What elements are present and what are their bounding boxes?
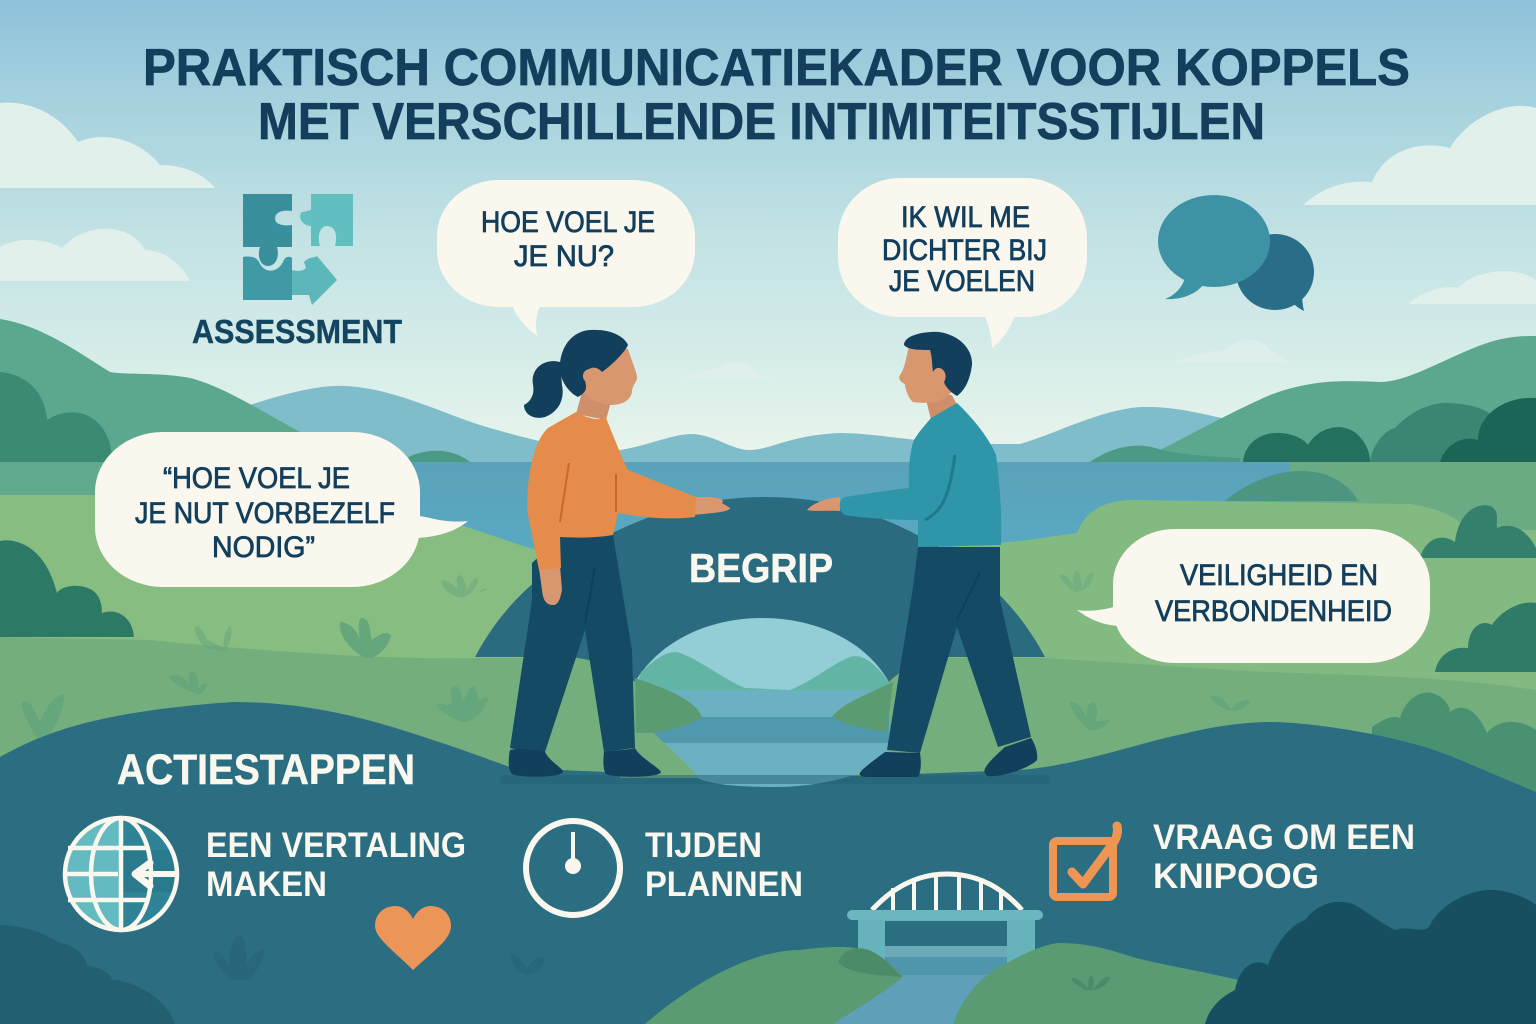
woman head [580, 345, 637, 405]
step: tijden plannen [645, 826, 803, 904]
teal sweater [840, 403, 1001, 547]
river banks [620, 678, 893, 778]
reaching hand [693, 497, 730, 515]
bubble: hoe voel je nu [437, 180, 695, 336]
woman hair [560, 330, 628, 397]
bridge: Begrip arch [475, 497, 1045, 692]
hanging hand [539, 566, 562, 605]
title [143, 39, 1410, 151]
meadow left [0, 495, 640, 680]
bubble: hoe voel je nu: JE NU? [514, 240, 614, 273]
step: vraag om een knipoog [1153, 818, 1415, 896]
man hand [807, 497, 840, 511]
man hair [904, 332, 972, 396]
back trees right [1243, 398, 1536, 462]
meadow right [640, 500, 1536, 720]
bottom right green hill [953, 943, 1280, 1024]
bottom hills and river [0, 874, 1536, 1024]
bush right lower [1372, 692, 1536, 800]
stream under the bridge [635, 690, 889, 787]
faint tufts [214, 935, 545, 980]
step: vraag om een knipoog: VRAAG OM EEN [1153, 818, 1415, 857]
title: PRAKTISCH COMMUNICATIEKADER VOOR KOPPELS [143, 39, 1410, 97]
right hill [1130, 336, 1536, 470]
bubble: veiligheid en verbondenheid: VERBONDENHEID [1155, 595, 1392, 628]
pants [510, 535, 635, 752]
left hill [0, 319, 360, 470]
clouds [0, 103, 1536, 380]
icon: heart [375, 906, 451, 970]
step: tijden plannen: PLANNEN [645, 865, 803, 904]
step: een vertaling maken: EEN VERTALING [206, 826, 466, 865]
tree right middle [1435, 603, 1536, 672]
background: sky [0, 0, 1536, 470]
hills inside the opening [635, 652, 889, 692]
title: MET VERSCHILLENDE INTIMITEITSSTIJLEN [258, 93, 1265, 151]
woman figure [509, 330, 730, 777]
bubble: veiligheid en verbondenheid [1077, 529, 1430, 663]
step: tijden plannen: TIJDEN [645, 826, 762, 865]
bottom left green hill [645, 947, 903, 1024]
step: vraag om een knipoog: KNIPOOG [1153, 857, 1319, 896]
bubble: left quote: JE NUT VORBEZELF [135, 497, 395, 530]
icon: speech bubbles [1158, 195, 1314, 311]
bubble: left quote [95, 432, 468, 587]
woman ear [583, 369, 597, 383]
icon: orange checkbox [1053, 826, 1118, 897]
heading: actiestappen: ACTIESTAPPEN [117, 746, 415, 794]
begrip label: BEGRIP [689, 545, 833, 591]
icon: clock [526, 821, 620, 915]
step: een vertaling maken: MAKEN [206, 865, 327, 904]
river bottom [833, 975, 1000, 1024]
bridge opening with sky [635, 618, 889, 692]
left and right shore bands [0, 462, 1536, 542]
arch and hangers [872, 874, 1022, 910]
bubble: dichter bij je voelen [838, 178, 1087, 348]
bottom-right dark bush [1205, 890, 1536, 1024]
orange sweater [527, 412, 696, 570]
distant blue mountains [250, 386, 1230, 470]
grass tufts [22, 570, 1250, 740]
bubble: veiligheid en verbondenheid: VEILIGHEID EN [1180, 559, 1378, 592]
lower meadow [0, 637, 1536, 800]
neck [576, 392, 612, 420]
bottom-left bush [0, 925, 175, 1024]
man figure [807, 332, 1037, 777]
man head [899, 345, 955, 403]
ground shadow [500, 775, 1050, 784]
bubble: dichter bij je voelen: IK WIL ME [901, 201, 1030, 234]
bubble: hoe voel je nu: HOE VOEL JE [481, 206, 655, 239]
man pants [887, 547, 1031, 753]
icon: puzzle assessment [243, 194, 353, 305]
foreground dark teal hill [0, 702, 1536, 1024]
small dark hills on the horizon [400, 446, 1240, 462]
assessment label: ASSESSMENT [192, 313, 402, 350]
tree left foreground [0, 540, 134, 637]
ponytail [524, 361, 563, 418]
step: een vertaling maken [206, 826, 466, 904]
small-bridge pillars and deck [847, 874, 1043, 977]
bubble: dichter bij je voelen: JE VOELEN [889, 265, 1035, 298]
icon: globe with arrow [65, 818, 178, 930]
bubble: dichter bij je voelen: DICHTER BIJ [882, 234, 1047, 267]
bubble: left quote: NODIG” [212, 531, 315, 564]
tree right upper [1420, 505, 1536, 558]
bubble: left quote: “HOE VOEL JE [163, 462, 350, 495]
lake [0, 462, 1536, 592]
shoes [509, 749, 563, 777]
neck [925, 395, 957, 420]
man shoes [860, 752, 921, 777]
back trees left [0, 372, 112, 462]
